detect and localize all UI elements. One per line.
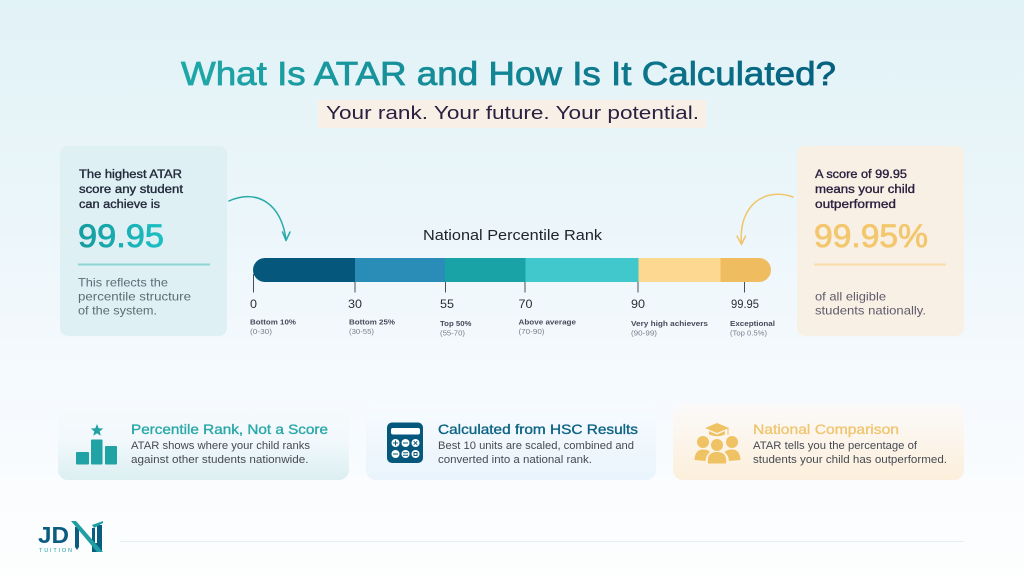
note: percentile structure (78, 276, 191, 318)
scale numbers (250, 297, 759, 311)
card heading: Percentile Rank, Not a Score (131, 422, 328, 437)
band ranges: (90-99) (631, 328, 657, 338)
logo: JDN Tuition (38, 521, 103, 554)
card text (131, 440, 311, 466)
icon: podium with star (76, 424, 117, 464)
big number: 99.95%: 99.95% (814, 218, 928, 254)
band labels: Bottom 25% (349, 318, 395, 326)
scale numbers: 0 (250, 297, 257, 311)
big number: 99.95: 99.95 (78, 218, 164, 254)
panel: score of 99.95 (797, 146, 964, 336)
band ranges: (0-30) (250, 327, 272, 336)
card text: converted into a national rank. (438, 454, 592, 466)
card text: against other students nationwide. (131, 454, 308, 466)
band labels (250, 318, 775, 328)
lead text: outperformed: outperformed (815, 199, 896, 211)
card text (438, 440, 634, 466)
card text: students your child has outperformed. (753, 454, 947, 466)
lead text: outperformed: A score of 99.95 (815, 169, 907, 181)
chart: national percentile rank (250, 227, 775, 338)
card heading: National Comparison (753, 422, 899, 437)
note: eligible students: students nationally. (815, 304, 926, 318)
panel: percentile rank, not a score (58, 404, 349, 480)
icon: calculator (387, 422, 423, 463)
band labels: Very high achievers (631, 319, 708, 328)
icon: students with graduation cap (694, 423, 740, 464)
subtitle: Your rank. Your future. Your potential. (326, 102, 699, 123)
card text: ATAR tells you the percentage of (753, 440, 918, 452)
card text: ATAR shows where your child ranks (131, 440, 311, 452)
percentile bar (253, 258, 771, 282)
subtitle (318, 100, 706, 128)
note: percentile structure: percentile structure (78, 290, 191, 304)
arrow: teal to bar (229, 197, 290, 240)
logo: JDN Tuition: TUITION (39, 548, 72, 554)
panel: highest ATAR score (60, 146, 227, 336)
arrow: gold to bar (737, 194, 793, 244)
band labels: Top 50% (440, 319, 472, 328)
lead text: highest score: can achieve is (79, 199, 160, 211)
band ranges: (70-90) (518, 327, 544, 336)
band ranges: (30-55) (349, 327, 374, 336)
lead text: highest score (79, 169, 184, 211)
lead text: outperformed (815, 169, 915, 211)
band ranges: (55-70) (440, 328, 465, 338)
note: eligible students (815, 290, 926, 318)
card text: Best 10 units are scaled, combined and (438, 440, 634, 452)
chart title: National Percentile Rank (423, 227, 603, 244)
panel: national comparison (673, 404, 964, 480)
scale numbers: 99.95 (731, 297, 759, 311)
note: eligible students: of all eligible (815, 290, 886, 304)
card heading: Calculated from HSC Results (438, 422, 638, 437)
band ranges (250, 327, 767, 338)
lead text: highest score: score any student (79, 184, 184, 196)
scale numbers: 30 (348, 297, 362, 311)
band labels: Above average (518, 318, 576, 326)
card text (753, 440, 947, 466)
scale numbers: 55 (440, 297, 454, 311)
lead text: highest score: The highest ATAR (79, 169, 182, 181)
scale numbers: 90 (631, 297, 645, 311)
title: What Is ATAR and How Is It Calculated? (181, 55, 836, 92)
panel: calculated from HSC results (366, 404, 656, 480)
logo: JDN Tuition: JD (38, 522, 69, 548)
band labels: Bottom 10% (250, 318, 296, 326)
note: percentile structure: of the system. (78, 304, 157, 318)
band labels: Exceptional (730, 319, 775, 328)
lead text: outperformed: means your child (815, 184, 915, 196)
note: percentile structure: This reflects the (78, 276, 168, 290)
scale numbers: 70 (518, 297, 533, 311)
band ranges: (Top 0.5%) (730, 328, 767, 338)
